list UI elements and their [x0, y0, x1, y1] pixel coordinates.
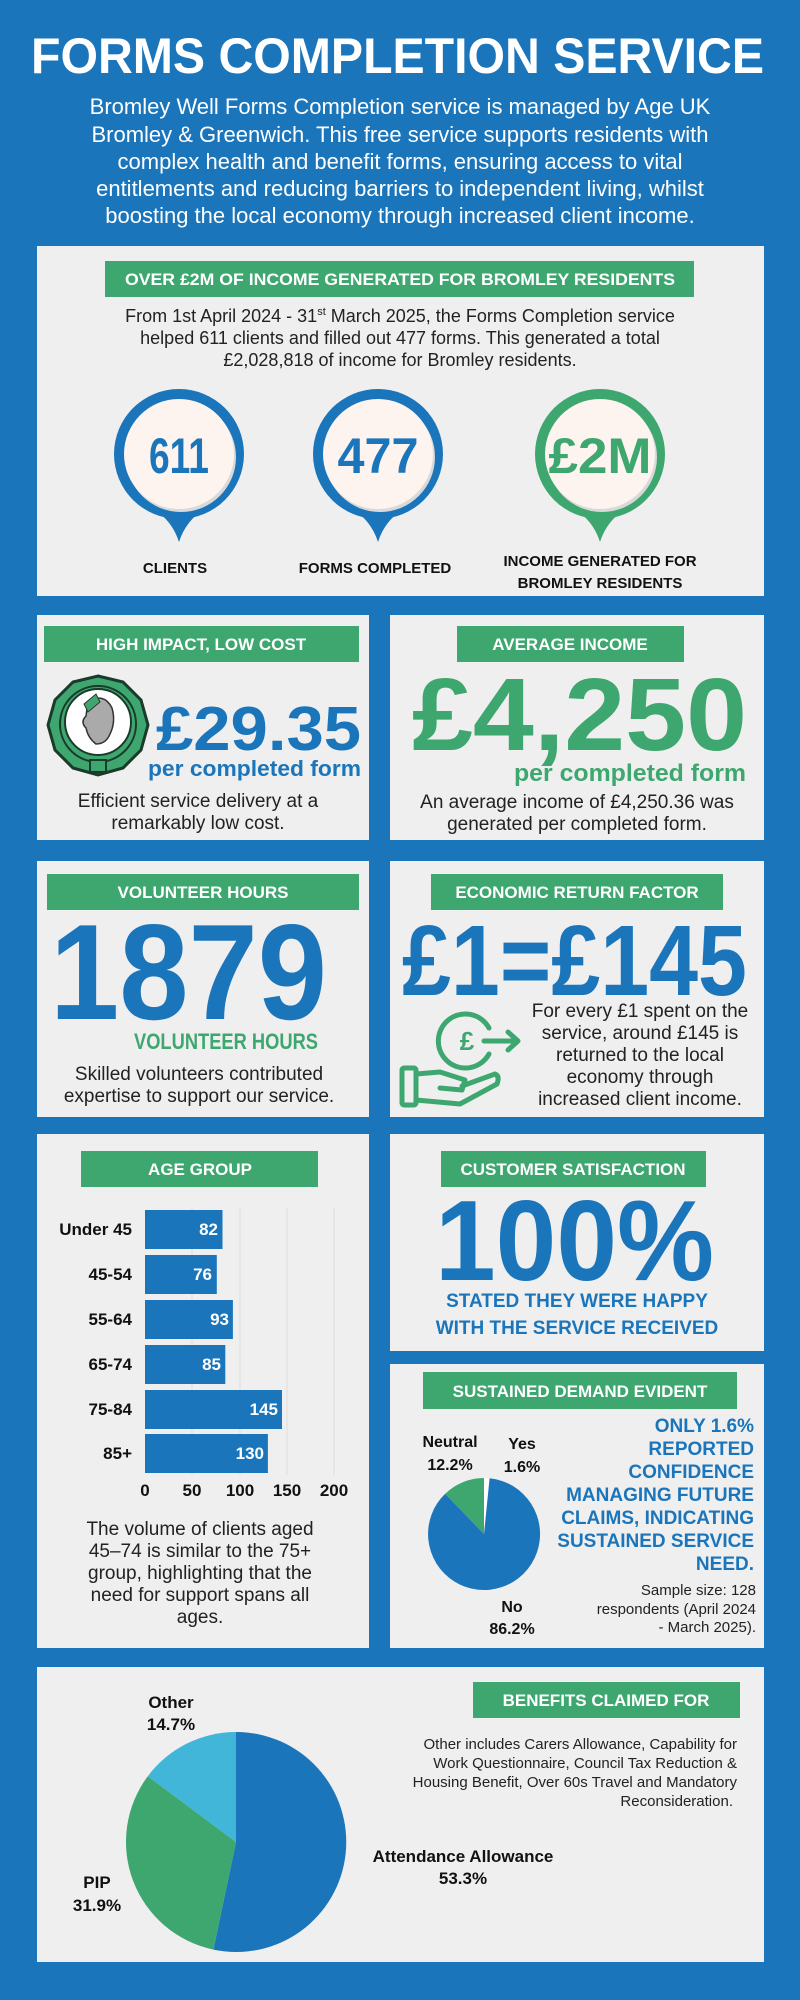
bar chart: age group: 100 — [226, 1481, 254, 1500]
heading: VOLUNTEER HOURS — [118, 883, 288, 902]
text block: 45–74 is similar to the 75+ — [89, 1541, 311, 1562]
pie chart: benefits: 53.3% — [439, 1869, 487, 1888]
text block: other includes: Work Questionnaire, Council Tax Reduction & — [433, 1755, 737, 1772]
text block: WITH THE SERVICE RECEIVED — [436, 1318, 718, 1339]
pin: clients: CLIENTS — [143, 560, 207, 577]
pie chart: confidence: Yes — [508, 1436, 536, 1453]
callout: only 1.6%: MANAGING FUTURE — [566, 1485, 754, 1506]
callout: only 1.6%: SUSTAINED SERVICE — [557, 1531, 754, 1552]
heading: CUSTOMER SATISFACTION — [460, 1160, 686, 1179]
text block: summary: March 2025, the Forms Completion service — [326, 306, 675, 326]
text block: need for support spans all — [91, 1585, 309, 1606]
heading — [457, 626, 684, 662]
text block — [86, 1519, 314, 1628]
text block: summary: £2,028,818 of income for Bromley residents. — [223, 350, 577, 370]
intro paragraph: Bromley & Greenwich. This free service supports residents with — [91, 122, 709, 147]
pin: forms completed: FORMS COMPLETED — [299, 560, 451, 577]
pin: income generated — [503, 389, 697, 592]
text block: other includes — [413, 1736, 737, 1810]
text block: summary — [125, 306, 675, 370]
heading: over 2m: OVER £2M OF INCOME GENERATED FOR BROMLEY RESIDENTS — [125, 270, 675, 289]
pie chart: confidence: Neutral — [422, 1434, 478, 1451]
heading: ECONOMIC RETURN FACTOR — [455, 883, 699, 902]
panel: high impact low cost — [37, 615, 369, 840]
text block: other includes: Other includes Carers Allowance, Capability for — [424, 1736, 737, 1753]
text block: sample size: Sample size: 128 — [641, 1582, 756, 1599]
bar chart: age group: 130 — [236, 1444, 264, 1463]
text block: sample size: - March 2025). — [658, 1619, 756, 1636]
panel: benefits claimed for — [37, 1667, 764, 1962]
panel: age group — [37, 1134, 369, 1648]
icon: hand with coin: £ — [460, 1026, 475, 1056]
callout: only 1.6%: NEED. — [696, 1554, 754, 1575]
heading — [431, 874, 723, 910]
intro paragraph: boosting the local economy through increased client income. — [105, 203, 695, 228]
icon: coin — [48, 676, 148, 775]
callout: only 1.6%: CLAIMS, INDICATING — [561, 1508, 754, 1529]
text block: returned to the local — [556, 1045, 724, 1066]
bar chart: age group: 75-84 — [89, 1400, 133, 1419]
text block: group, highlighting that the — [88, 1563, 312, 1584]
pin: income generated: INCOME GENERATED FOR — [503, 553, 697, 570]
callout: only 1.6%: ONLY 1.6% — [655, 1416, 754, 1437]
text block — [532, 1001, 748, 1110]
pin: income generated: BROMLEY RESIDENTS — [518, 575, 682, 592]
bar chart: age group: 150 — [273, 1481, 301, 1500]
heading: AGE GROUP — [148, 1160, 252, 1179]
stat: £1=£145: £1=£145 — [402, 905, 747, 1017]
pin: forms completed: 477 — [338, 428, 418, 484]
heading: AVERAGE INCOME — [492, 635, 648, 654]
pie chart: benefits: 14.7% — [147, 1715, 195, 1734]
callout: only 1.6% — [557, 1416, 754, 1575]
text block: service, around £145 is — [542, 1023, 738, 1044]
intro paragraph — [90, 94, 711, 228]
bar chart: age group: 85 — [202, 1355, 221, 1374]
pie chart: benefits — [73, 1693, 553, 1952]
text block: sample size: respondents (April 2024 — [597, 1601, 756, 1618]
text block: summary: helped 611 clients and filled out 477 forms. This generated a total — [140, 328, 660, 348]
pie chart: confidence — [422, 1434, 540, 1638]
heading: BENEFITS CLAIMED FOR — [503, 1691, 709, 1710]
bar chart: age group: 85+ — [103, 1444, 132, 1463]
text block: increased client income. — [538, 1089, 742, 1110]
text block: The volume of clients aged — [86, 1519, 314, 1540]
heading — [473, 1682, 740, 1718]
text block: remarkably low cost. — [111, 813, 285, 834]
bar chart: age group — [59, 1208, 348, 1500]
title: FORMS COMPLETION SERVICE — [31, 28, 764, 84]
intro paragraph: complex health and benefit forms, ensuring access to vital — [118, 149, 682, 174]
text block: An average income of £4,250.36 was — [420, 792, 734, 813]
heading: HIGH IMPACT, LOW COST — [96, 635, 307, 654]
heading — [44, 626, 359, 662]
text block: Skilled volunteers contributed — [75, 1064, 323, 1085]
text block — [64, 1064, 334, 1107]
panel: average income — [390, 615, 764, 840]
text block — [420, 792, 734, 835]
bar chart: age group: 93 — [210, 1310, 229, 1329]
panel: economic return factor — [390, 861, 764, 1117]
panel: customer satisfaction — [390, 1134, 764, 1351]
text block — [78, 791, 319, 834]
bar chart: age group: 65-74 — [89, 1355, 133, 1374]
heading — [81, 1151, 318, 1187]
text block: expertise to support our service. — [64, 1086, 334, 1107]
bar chart: age group: 45-54 — [89, 1265, 133, 1284]
stat: 100%: 100% — [435, 1178, 714, 1305]
bar chart: age group: 76 — [193, 1265, 212, 1284]
panel: income overview — [37, 246, 764, 596]
callout: only 1.6%: CONFIDENCE — [628, 1462, 754, 1483]
text block: sample size — [597, 1582, 756, 1636]
text block: For every £1 spent on the — [532, 1001, 748, 1022]
heading: over 2m — [105, 261, 694, 297]
text block: generated per completed form. — [447, 814, 707, 835]
bar chart: age group: 200 — [320, 1481, 348, 1500]
bar chart: age group: 145 — [250, 1400, 278, 1419]
text block: economy through — [567, 1067, 713, 1088]
stat: 1879: 1879 — [50, 896, 327, 1048]
panel: sustained demand — [390, 1364, 764, 1648]
bar chart: age group: 0 — [140, 1481, 150, 1500]
icon: hand with coin — [402, 1014, 518, 1105]
panel: volunteer hours — [37, 861, 369, 1117]
heading: SUSTAINED DEMAND EVIDENT — [453, 1382, 708, 1401]
intro paragraph: Bromley Well Forms Completion service is managed by Age UK — [90, 94, 711, 119]
intro paragraph: entitlements and reducing barriers to independent living, whilst — [96, 176, 704, 201]
stat: average income: £4,250 — [412, 657, 747, 772]
pie chart: confidence: 86.2% — [489, 1621, 535, 1638]
bar chart: age group: 55-64 — [89, 1310, 133, 1329]
bar chart: age group: 82 — [199, 1220, 218, 1239]
text block: STATED THEY WERE HAPPY — [446, 1291, 708, 1312]
pin: clients: 611 — [149, 428, 209, 484]
pie chart: benefits: Other — [148, 1693, 194, 1712]
text block: other includes: Reconsideration. — [620, 1793, 733, 1810]
heading — [441, 1151, 706, 1187]
stat: cost per form: £29.35 — [156, 695, 361, 764]
heading — [423, 1372, 737, 1409]
text block — [436, 1291, 718, 1339]
pie chart: confidence: No — [501, 1599, 523, 1616]
pie chart: benefits: Attendance Allowance — [373, 1847, 553, 1866]
bar chart: age group: Under 45 — [59, 1220, 132, 1239]
pin: forms completed — [299, 389, 451, 577]
text block: ages. — [177, 1607, 223, 1628]
pie chart: confidence: 12.2% — [427, 1457, 473, 1474]
pie chart: confidence: 1.6% — [504, 1459, 540, 1476]
stat: average income: per completed form — [514, 760, 746, 787]
text block: summary: From 1st April 2024 - 31 — [125, 306, 317, 326]
heading — [47, 874, 359, 910]
pie chart: benefits: 31.9% — [73, 1896, 121, 1915]
pin: income generated: £2M — [548, 428, 652, 484]
pie chart: benefits: PIP — [83, 1873, 111, 1892]
text block: summary: st — [317, 306, 326, 318]
stat: 1879: VOLUNTEER HOURS — [134, 1029, 318, 1054]
bar chart: age group: 50 — [183, 1481, 201, 1500]
pin: clients — [114, 389, 244, 577]
callout: only 1.6%: REPORTED — [648, 1439, 754, 1460]
text block: Efficient service delivery at a — [78, 791, 319, 812]
stat: cost per form: per completed form — [148, 756, 361, 781]
text block: other includes: Housing Benefit, Over 60s Travel and Mandatory — [413, 1774, 737, 1791]
